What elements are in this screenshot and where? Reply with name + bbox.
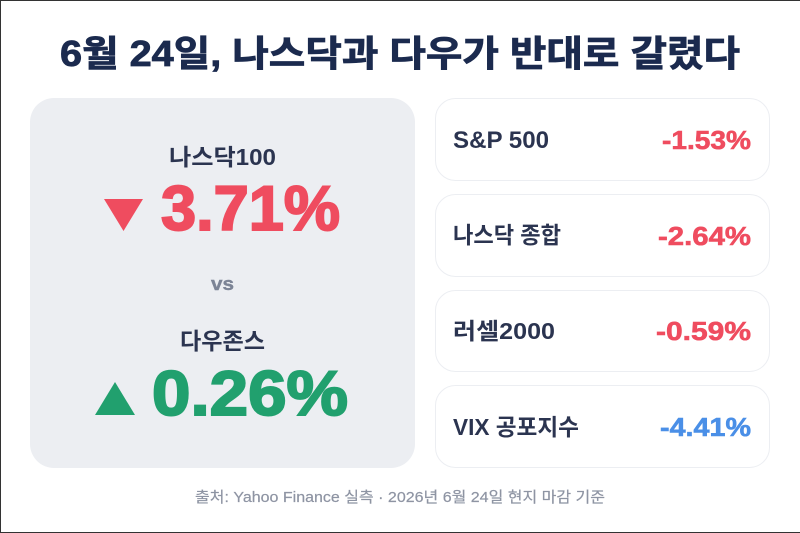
vs label: vs <box>211 274 234 294</box>
panel: index comparison <box>30 98 415 468</box>
label: VIX 공포지수 <box>453 414 579 440</box>
label: S&P 500 <box>453 127 549 154</box>
value: -4.41% <box>660 412 751 442</box>
panel: nasdaq composite <box>436 194 770 276</box>
icon: up triangle <box>95 382 135 415</box>
nasdaq 100 value: 3.71% <box>161 174 340 244</box>
dow jones label: 다우존스 <box>180 328 265 354</box>
label: 러셀2000 <box>453 318 555 344</box>
source note: 출처: Yahoo Finance 실측 · 2026년 6월 24일 현지 마감 기준 <box>195 489 605 506</box>
panel: VIX <box>436 386 770 468</box>
panel: S&P 500 <box>436 98 770 180</box>
value: -2.64% <box>658 221 751 251</box>
value: -1.53% <box>662 125 751 155</box>
value: -0.59% <box>656 316 751 346</box>
title: 6월 24일, 나스닥과 다우가 반대로 갈렸다 <box>60 33 740 74</box>
nasdaq 100 label: 나스닥100 <box>169 144 276 170</box>
label: 나스닥 종합 <box>453 222 561 248</box>
icon: down triangle <box>104 199 143 231</box>
dow jones value: 0.26% <box>152 359 348 429</box>
panel: russell 2000 <box>436 290 770 372</box>
